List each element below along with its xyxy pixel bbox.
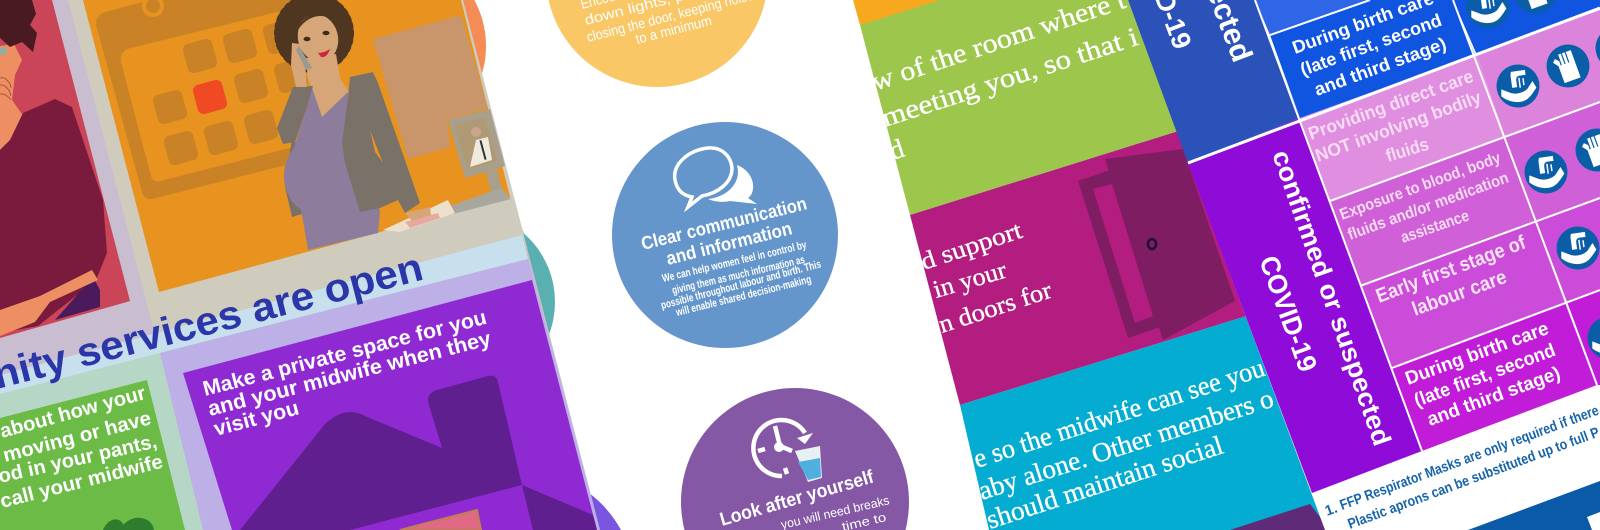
table cells: blue rows	[1255, 0, 1600, 118]
circle text: will enable shared decision-making	[674, 274, 813, 319]
text block: aby alone. Other members o	[975, 383, 1277, 506]
table row: exposure to fluids: Exposure to blood, body	[1338, 150, 1503, 224]
circle: blue clear communication	[612, 122, 838, 348]
table cells: blue rows: and third stage)	[1312, 33, 1449, 100]
footer band	[1468, 481, 1600, 530]
text block	[201, 306, 494, 441]
table row: early first stage: labour care	[1409, 266, 1510, 321]
text block: n doors for	[936, 277, 1056, 339]
text block: and your midwife when they	[206, 327, 494, 421]
text block: meeting you, so that i	[878, 21, 1142, 133]
icon: clock and water glass	[753, 420, 822, 482]
circle: orange background	[294, 0, 486, 142]
text block	[917, 217, 1056, 339]
left figure: woman holding mouth	[0, 0, 107, 336]
circle text: to a minimum	[634, 12, 713, 47]
text block: d support	[917, 217, 1026, 276]
row header: blue suspected column	[1125, 0, 1300, 163]
computer monitor	[448, 109, 505, 192]
text block	[867, 0, 1142, 166]
text block: Make a private space for you	[201, 306, 489, 401]
circle text	[660, 239, 822, 319]
wall noticeboard	[373, 15, 488, 159]
panel: private space advice	[183, 280, 597, 530]
icon: calendar	[96, 0, 345, 199]
panel: maternity services poster	[0, 0, 600, 530]
text block: d	[886, 133, 908, 166]
table row: direct care: NOT involving bodily	[1313, 87, 1484, 166]
table row: during birth care: During birth care	[1403, 318, 1552, 390]
dark purple footer strip	[1230, 504, 1330, 530]
jacket left sleeve	[277, 86, 313, 144]
jacket right	[342, 72, 420, 213]
row header: purple confirmed column: COVID-19	[1253, 252, 1323, 376]
table row: direct care: fluids	[1383, 134, 1431, 166]
table row: during birth care	[1392, 290, 1600, 451]
text block: in your	[930, 257, 1010, 304]
row header: purple confirmed column: confirmed or suspected	[1266, 146, 1397, 450]
table row: during birth care: (late first, second	[1411, 340, 1558, 412]
dress	[290, 88, 380, 250]
panel: orange appointment scene	[83, 0, 524, 292]
panel: home visit advice poster	[853, 0, 1340, 530]
text block: about how your	[0, 382, 148, 443]
circle text: possible throughout labour and birth. This	[660, 258, 822, 312]
circle heading: and information	[664, 217, 794, 269]
text block: e so the midwife can see you	[970, 352, 1269, 474]
row header: purple confirmed column	[1188, 118, 1422, 493]
text block: od in your pants,	[0, 431, 159, 488]
text block: moving or have	[1, 407, 153, 467]
jacket left lower panel	[285, 138, 310, 217]
text block	[970, 352, 1277, 530]
circle text: giving them as much information as	[671, 254, 806, 297]
icon: speech bubbles	[675, 148, 757, 207]
text block: call your midwife	[0, 451, 165, 513]
table row: direct care	[1300, 10, 1600, 201]
table row: exposure to fluids: assistance	[1399, 208, 1472, 247]
panel: green room advice	[860, 0, 1300, 215]
text block	[0, 382, 165, 513]
circle: violet background	[405, 470, 635, 530]
panel: magenta door advice	[910, 93, 1330, 405]
heading: nity services are open	[0, 245, 427, 398]
circle: yellow calm environment	[546, 0, 768, 87]
raised hand and phone	[291, 43, 307, 87]
panel: PPE table poster	[1125, 0, 1600, 530]
circle: purple look after yourself	[681, 388, 909, 530]
circle heading: Clear communication	[639, 192, 809, 254]
figure: pregnant woman on phone	[277, 0, 431, 250]
heading band	[0, 235, 600, 530]
table grid lines	[1188, 0, 1600, 451]
panel: teal distancing advice	[960, 290, 1340, 530]
table row: exposure to fluids: fluids and/or medication	[1346, 170, 1511, 244]
circle text: We can help women feel in control by	[661, 239, 808, 285]
icon: door	[1078, 149, 1235, 340]
circle: teal background	[373, 211, 555, 393]
desk	[300, 197, 524, 290]
keyboard	[450, 188, 511, 214]
table row: early first stage	[1360, 198, 1600, 368]
papers on desk	[383, 200, 455, 232]
footnotes: 1.	[1323, 501, 1340, 520]
circle heading: Look after yourself	[718, 467, 877, 530]
table row: direct care: Providing direct care	[1306, 66, 1476, 144]
text block: visit you	[211, 397, 301, 441]
table row: during birth care: and third stage)	[1425, 363, 1563, 431]
table row: early first stage: Early first stage of	[1373, 232, 1529, 308]
icon: house	[240, 376, 597, 530]
panel: movements advice	[0, 380, 185, 530]
table cells: blue rows: (late first, second	[1298, 10, 1444, 80]
icon: green shape	[97, 514, 157, 530]
table row: exposure to fluids	[1330, 102, 1600, 286]
